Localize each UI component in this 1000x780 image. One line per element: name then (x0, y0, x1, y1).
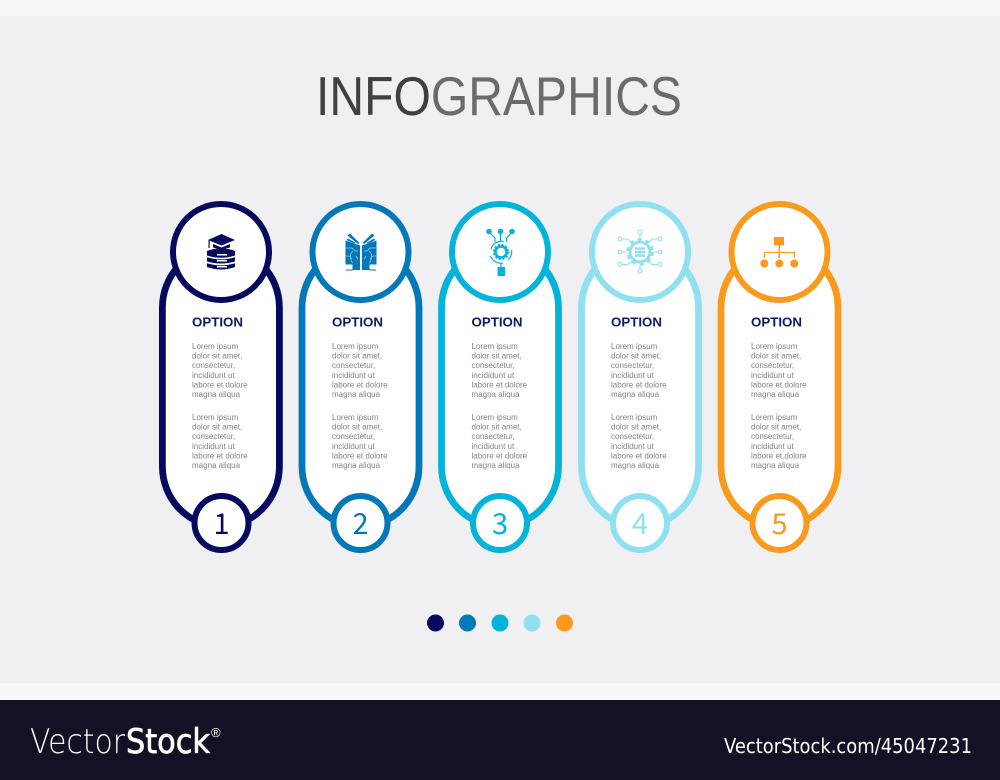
text block: incididunt ut (192, 442, 235, 451)
text block: consectetur, (611, 361, 654, 370)
text block: incididunt ut (751, 442, 794, 451)
text block: Lorem ipsum (751, 342, 798, 351)
text block: labore et dolore (192, 451, 248, 460)
text block: consectetur, (472, 432, 515, 441)
heading: OPTION (332, 314, 383, 330)
text block: magna aliqua (192, 390, 241, 399)
text block: magna aliqua (472, 461, 520, 470)
number badge: 3 (492, 501, 508, 543)
number badge: 5 (771, 501, 788, 543)
footer logo: Stock (126, 722, 210, 762)
number badge (613, 496, 667, 550)
text block: labore et dolore (751, 451, 807, 460)
text block: labore et dolore (332, 380, 388, 389)
number badge (473, 496, 527, 550)
text block: incididunt ut (751, 371, 794, 380)
icon: gear with nodes (486, 229, 515, 276)
heading: OPTION (472, 314, 522, 330)
text block: consectetur, (751, 361, 794, 370)
text block: dolor sit amet, (472, 352, 522, 361)
text block: labore et dolore (472, 451, 528, 460)
text block: dolor sit amet, (611, 352, 661, 361)
text block: incididunt ut (332, 371, 375, 380)
footer logo (30, 722, 210, 762)
text block: incididunt ut (611, 442, 654, 451)
panel: option 4 (582, 204, 698, 550)
heading: OPTION (751, 314, 802, 330)
text block: Lorem ipsum (332, 413, 379, 422)
text block: consectetur, (192, 432, 235, 441)
text block: incididunt ut (192, 371, 235, 380)
text block: Lorem ipsum (332, 342, 379, 351)
text block: labore et dolore (751, 380, 807, 389)
text block: Lorem ipsum (192, 342, 239, 351)
text block: magna aliqua (332, 461, 381, 470)
text block: dolor sit amet, (751, 423, 801, 432)
number badge: 2 (352, 501, 369, 543)
text block: magna aliqua (192, 461, 241, 470)
text block: magna aliqua (611, 461, 660, 470)
text block: labore et dolore (192, 380, 248, 389)
text block: magna aliqua (611, 390, 660, 399)
text block: incididunt ut (472, 442, 515, 451)
title: INFOGRAPHICS (316, 65, 682, 127)
footer logo: Vector (30, 722, 125, 762)
panel: option 2 (302, 204, 419, 550)
icon: hierarchy chart (760, 237, 798, 268)
text block: Lorem ipsum (611, 342, 658, 351)
number badge: 4 (632, 501, 648, 543)
text block: magna aliqua (751, 390, 800, 399)
icon: gear with circuit nodes (618, 230, 662, 273)
text block: dolor sit amet, (472, 423, 522, 432)
text block: Lorem ipsum (192, 413, 239, 422)
text block: dolor sit amet, (332, 352, 382, 361)
number badge (194, 496, 248, 550)
text block: Lorem ipsum (611, 413, 658, 422)
number badge (752, 496, 806, 550)
text block: labore et dolore (472, 380, 528, 389)
text block: consectetur, (332, 361, 375, 370)
registered mark: ® (211, 725, 221, 740)
icon: book and brain (346, 234, 376, 270)
heading: OPTION (611, 314, 662, 330)
icon: graduation cap on database (207, 234, 235, 270)
text block: incididunt ut (472, 371, 515, 380)
panel: option 3 (442, 204, 558, 550)
pagination dots (427, 614, 573, 632)
number badge: 1 (213, 501, 230, 543)
text block: magna aliqua (472, 390, 520, 399)
text block: Lorem ipsum (751, 413, 798, 422)
text block: dolor sit amet, (332, 423, 382, 432)
text block: consectetur, (611, 432, 654, 441)
footer id: VectorStock.com/45047231 (724, 734, 972, 758)
text block: labore et dolore (611, 380, 667, 389)
text block: Lorem ipsum (472, 342, 518, 351)
text block: dolor sit amet, (611, 423, 661, 432)
text block: incididunt ut (611, 371, 654, 380)
footer bar (0, 700, 1000, 780)
text block: consectetur, (751, 432, 794, 441)
text block: consectetur, (192, 361, 235, 370)
text block: magna aliqua (332, 390, 381, 399)
text block: labore et dolore (611, 451, 667, 460)
text block: consectetur, (332, 432, 375, 441)
text block: Lorem ipsum (472, 413, 518, 422)
text block: magna aliqua (751, 461, 800, 470)
panel: option 5 (721, 204, 838, 550)
number badge (334, 496, 388, 550)
panel: option 1 (162, 204, 279, 550)
text block: dolor sit amet, (192, 423, 242, 432)
text block: consectetur, (472, 361, 515, 370)
text block: dolor sit amet, (751, 352, 801, 361)
text block: dolor sit amet, (192, 352, 242, 361)
heading: OPTION (192, 314, 243, 330)
text block: incididunt ut (332, 442, 375, 451)
text block: labore et dolore (332, 451, 388, 460)
